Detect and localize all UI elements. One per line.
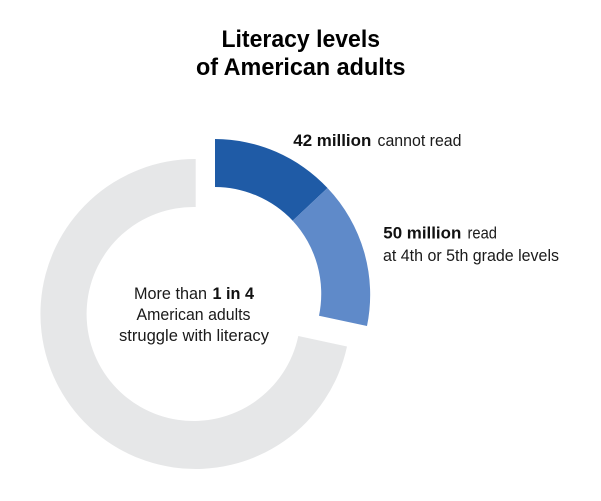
center text bbox=[119, 285, 270, 345]
label: 50 million bbox=[383, 224, 559, 265]
label: 42 million: 42 million bbox=[293, 132, 371, 150]
title bbox=[196, 26, 406, 81]
center text: More than bbox=[134, 285, 207, 303]
label: 50 million: read bbox=[468, 224, 497, 242]
center text: American adults bbox=[136, 306, 250, 324]
label: 42 million bbox=[293, 132, 462, 150]
donut chart bbox=[40, 139, 370, 469]
label: 50 million: 50 million bbox=[383, 224, 461, 242]
center text: 1 in 4 bbox=[212, 285, 255, 303]
title: of American adults bbox=[196, 54, 406, 81]
center text: struggle with literacy bbox=[119, 327, 270, 345]
segment: 42 million cannot read bbox=[215, 139, 328, 221]
title: Literacy levels bbox=[222, 26, 380, 53]
segment: remaining adults bbox=[40, 159, 347, 469]
label: 50 million: at 4th or 5th grade levels bbox=[383, 247, 559, 265]
label: 42 million: cannot read bbox=[378, 132, 462, 150]
segment: 50 million read at 4th or 5th grade levels bbox=[293, 188, 370, 326]
